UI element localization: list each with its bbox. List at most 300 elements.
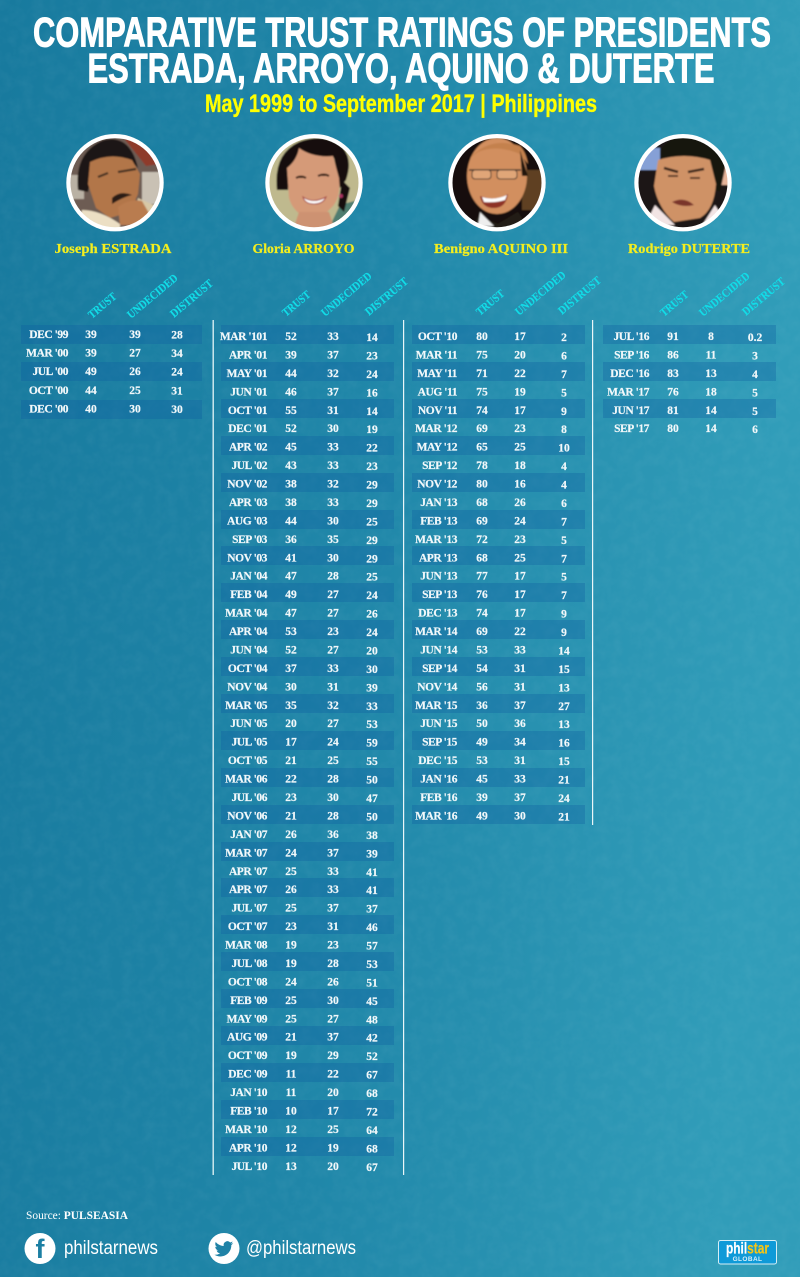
table: Aquino ratings: 69 xyxy=(476,515,488,527)
table: Arroyo ratings: JAN '04 xyxy=(230,571,268,583)
name: Gloria Arroyo: Gloria ARROYO xyxy=(252,242,355,257)
table: Arroyo ratings: 19 xyxy=(285,958,297,970)
table: Duterte ratings: 80 xyxy=(667,423,679,435)
table: Arroyo ratings: NOV '06 xyxy=(227,810,268,822)
table: Aquino ratings: 68 xyxy=(476,552,488,564)
table: Arroyo ratings: 25 xyxy=(285,1013,297,1025)
table: Arroyo ratings: OCT '05 xyxy=(228,755,268,767)
table: Arroyo ratings: FEB '04 xyxy=(230,589,268,601)
table: Estrada ratings: 26 xyxy=(129,366,141,378)
table: Arroyo ratings: 25 xyxy=(366,572,378,584)
table: Aquino ratings: 33 xyxy=(514,644,526,656)
table: Arroyo ratings: 30 xyxy=(327,423,339,435)
icon: facebook: f xyxy=(36,1234,46,1264)
table: Aquino ratings: 77 xyxy=(476,571,488,583)
table: Duterte ratings: 6 xyxy=(752,424,758,436)
table: Arroyo ratings: 20 xyxy=(285,718,297,730)
table: Duterte ratings: 91 xyxy=(667,331,679,343)
table: Estrada ratings: 49 xyxy=(85,366,97,378)
table: Aquino ratings: JUN '15 xyxy=(420,718,458,730)
table: Aquino ratings: 36 xyxy=(476,700,488,712)
divider line 2 xyxy=(403,320,404,1175)
table: Estrada ratings xyxy=(21,325,202,419)
table: Arroyo ratings: 22 xyxy=(327,1069,339,1081)
table: Arroyo ratings: 33 xyxy=(327,884,339,896)
table: Arroyo ratings: 33 xyxy=(366,701,378,713)
table: Duterte ratings: 18 xyxy=(705,386,717,398)
table: Aquino ratings: 31 xyxy=(514,681,526,693)
table: Arroyo ratings: NOV '04 xyxy=(227,681,268,693)
table: Arroyo ratings: OCT '08 xyxy=(228,976,268,988)
table: Arroyo ratings: APR '03 xyxy=(229,497,268,509)
table: Arroyo ratings: 49 xyxy=(285,589,297,601)
column headers: Aquino: UNDECIDED xyxy=(513,269,568,318)
table: Aquino ratings: 15 xyxy=(558,664,570,676)
table: Arroyo ratings: 24 xyxy=(366,369,378,381)
table: Aquino ratings: 54 xyxy=(476,663,488,675)
table: Arroyo ratings: 27 xyxy=(327,1013,339,1025)
table: Arroyo ratings: APR '04 xyxy=(229,626,268,638)
table: Arroyo ratings: 21 xyxy=(285,810,297,822)
column headers: Arroyo: DISTRUST xyxy=(363,275,411,318)
table: Arroyo ratings xyxy=(220,325,394,1174)
table: Aquino ratings: 15 xyxy=(558,756,570,768)
table: Aquino ratings xyxy=(412,325,585,824)
table: Arroyo ratings: 19 xyxy=(285,1050,297,1062)
table: Estrada ratings: JUL '00 xyxy=(32,366,69,378)
table: Duterte ratings: 14 xyxy=(705,423,717,435)
table: Arroyo ratings: 24 xyxy=(327,737,339,749)
table: Estrada ratings: 39 xyxy=(85,348,97,360)
table: Duterte ratings xyxy=(603,325,776,436)
column headers: Estrada xyxy=(86,272,216,321)
table: Duterte ratings: 13 xyxy=(705,368,717,380)
column headers: Duterte: TRUST xyxy=(658,289,691,319)
table: Arroyo ratings: 24 xyxy=(366,590,378,602)
table: Arroyo ratings: 31 xyxy=(327,921,339,933)
table: Arroyo ratings: 22 xyxy=(366,443,378,455)
table: Duterte ratings: 4 xyxy=(752,369,758,381)
table: Arroyo ratings: 32 xyxy=(327,478,339,490)
table: Arroyo ratings: 52 xyxy=(285,644,297,656)
column headers: Duterte: UNDECIDED xyxy=(697,270,752,319)
logo: philstar global xyxy=(718,1240,776,1264)
table: Aquino ratings: 75 xyxy=(476,349,488,361)
table: Arroyo ratings: 31 xyxy=(327,681,339,693)
table: Aquino ratings: 23 xyxy=(514,423,526,435)
table: Estrada ratings: DEC '99 xyxy=(29,329,69,341)
portrait: Joseph Estrada xyxy=(66,134,164,232)
table: Arroyo ratings: JUL '10 xyxy=(231,1161,268,1173)
column headers: Duterte: DISTRUST xyxy=(740,275,788,318)
table: Arroyo ratings: AUG '09 xyxy=(227,1032,268,1044)
table: Aquino ratings: 25 xyxy=(514,552,526,564)
table: Aquino ratings: 80 xyxy=(476,331,488,343)
table: Arroyo ratings: MAR '101 xyxy=(220,331,268,343)
table: Estrada ratings: 30 xyxy=(129,404,141,416)
table: Arroyo ratings: 33 xyxy=(327,497,339,509)
table: Aquino ratings: 6 xyxy=(561,498,567,510)
table: Arroyo ratings: 23 xyxy=(327,940,339,952)
column headers: Aquino: TRUST xyxy=(474,288,507,318)
table: Arroyo ratings: 22 xyxy=(285,774,297,786)
table: Arroyo ratings: 47 xyxy=(366,793,378,805)
divider line 1 xyxy=(212,320,214,1175)
table: Aquino ratings: 76 xyxy=(476,589,488,601)
table: Arroyo ratings: 17 xyxy=(327,1106,339,1118)
table: Arroyo ratings: 19 xyxy=(327,1142,339,1154)
column headers: Estrada: UNDECIDED xyxy=(125,272,180,321)
table: Arroyo ratings: 25 xyxy=(327,1124,339,1136)
table: Arroyo ratings: 11 xyxy=(286,1087,297,1099)
table: Aquino ratings: 69 xyxy=(476,423,488,435)
table: Arroyo ratings: 23 xyxy=(285,792,297,804)
table: Aquino ratings: 65 xyxy=(476,442,488,454)
table: Arroyo ratings: JUL '07 xyxy=(231,903,268,915)
table: Estrada ratings: 30 xyxy=(171,404,183,416)
table: Arroyo ratings: OCT '09 xyxy=(228,1050,268,1062)
table: Arroyo ratings: 30 xyxy=(327,995,339,1007)
table: Aquino ratings: OCT '10 xyxy=(418,331,458,343)
table: Arroyo ratings: 35 xyxy=(285,700,297,712)
table: Duterte ratings: SEP '16 xyxy=(614,349,650,361)
table: Arroyo ratings: 19 xyxy=(366,424,378,436)
table: Arroyo ratings: 27 xyxy=(327,644,339,656)
table: Aquino ratings: 5 xyxy=(561,387,567,399)
table: Arroyo ratings: 33 xyxy=(327,331,339,343)
table: Aquino ratings: 13 xyxy=(558,719,570,731)
table: Arroyo ratings: 30 xyxy=(327,552,339,564)
table: Duterte ratings: 76 xyxy=(667,386,679,398)
table: Arroyo ratings: JAN '10 xyxy=(230,1087,268,1099)
table: Duterte ratings: 5 xyxy=(752,406,758,418)
column headers: Estrada: DISTRUST xyxy=(168,277,216,320)
table: Arroyo ratings: NOV '02 xyxy=(227,478,268,490)
table: Aquino ratings: 23 xyxy=(514,534,526,546)
table: Arroyo ratings: 37 xyxy=(327,386,339,398)
table: Arroyo ratings: 38 xyxy=(285,478,297,490)
table: Arroyo ratings: 52 xyxy=(285,423,297,435)
table: Arroyo ratings: 33 xyxy=(327,663,339,675)
table: Arroyo ratings: FEB '10 xyxy=(230,1106,268,1118)
table: Aquino ratings: DEC '13 xyxy=(418,608,458,620)
table: Aquino ratings: MAR '15 xyxy=(415,700,458,712)
table: Arroyo ratings: 33 xyxy=(327,866,339,878)
table: Arroyo ratings: 28 xyxy=(327,571,339,583)
table: Arroyo ratings: JUL '06 xyxy=(231,792,268,804)
icon: twitter xyxy=(208,1233,240,1264)
table: Aquino ratings: 33 xyxy=(514,774,526,786)
table: Aquino ratings: SEP '13 xyxy=(422,589,458,601)
table: Estrada ratings: MAR '00 xyxy=(26,348,69,360)
table: Arroyo ratings: 42 xyxy=(366,1033,378,1045)
subtitle: May 1999 to September 2017 | Philippines xyxy=(205,90,597,118)
table: Aquino ratings: 7 xyxy=(561,590,567,602)
table: Aquino ratings: 31 xyxy=(514,755,526,767)
table: Duterte ratings: MAR '17 xyxy=(607,386,650,398)
table: Duterte ratings: JUL '16 xyxy=(613,331,650,343)
table: Arroyo ratings: 23 xyxy=(285,921,297,933)
portrait: Benigno Aquino III xyxy=(448,134,546,231)
facebook handle: philstarnews xyxy=(64,1238,158,1259)
table: Arroyo ratings: 20 xyxy=(327,1087,339,1099)
table: Aquino ratings: SEP '14 xyxy=(422,663,458,675)
table: Arroyo ratings: 30 xyxy=(327,792,339,804)
table: Aquino ratings: 30 xyxy=(514,810,526,822)
table: Arroyo ratings: 12 xyxy=(285,1142,297,1154)
table: Aquino ratings: 18 xyxy=(514,460,526,472)
table: Aquino ratings: 26 xyxy=(514,497,526,509)
table: Aquino ratings: 22 xyxy=(514,368,526,380)
table: Arroyo ratings: 35 xyxy=(327,534,339,546)
table: Arroyo ratings: 46 xyxy=(285,386,297,398)
table: Duterte ratings: 3 xyxy=(752,350,758,362)
table: Arroyo ratings: 41 xyxy=(366,867,378,879)
table: Arroyo ratings: 16 xyxy=(366,387,378,399)
table: Aquino ratings: 4 xyxy=(561,461,567,473)
table: Aquino ratings: 5 xyxy=(561,535,567,547)
table: Arroyo ratings: OCT '04 xyxy=(228,663,268,675)
table: Arroyo ratings: 52 xyxy=(366,1051,378,1063)
table: Aquino ratings: 7 xyxy=(561,516,567,528)
table: Arroyo ratings: 59 xyxy=(366,738,378,750)
table: Duterte ratings: 0.2 xyxy=(748,332,762,344)
table: Aquino ratings: MAR '12 xyxy=(415,423,458,435)
table: Aquino ratings: 68 xyxy=(476,497,488,509)
table: Arroyo ratings: APR '01 xyxy=(229,349,268,361)
table: Aquino ratings: 9 xyxy=(561,406,567,418)
table: Aquino ratings: 22 xyxy=(514,626,526,638)
table: Estrada ratings: DEC '00 xyxy=(29,404,69,416)
table: Arroyo ratings: OCT '07 xyxy=(228,921,268,933)
table: Arroyo ratings: 46 xyxy=(366,922,378,934)
table: Arroyo ratings: 45 xyxy=(285,442,297,454)
table: Arroyo ratings: 41 xyxy=(285,552,297,564)
table: Arroyo ratings: 30 xyxy=(327,515,339,527)
table: Arroyo ratings: APR '02 xyxy=(229,442,268,454)
table: Arroyo ratings: 19 xyxy=(285,940,297,952)
table: Estrada ratings: OCT '00 xyxy=(29,385,69,397)
table: Arroyo ratings: DEC '09 xyxy=(228,1069,268,1081)
table: Aquino ratings: 7 xyxy=(561,369,567,381)
table: Duterte ratings: 11 xyxy=(706,349,717,361)
table: Arroyo ratings: 23 xyxy=(366,461,378,473)
table: Aquino ratings: 39 xyxy=(476,792,488,804)
table: Estrada ratings: 39 xyxy=(85,329,97,341)
table: Arroyo ratings: JAN '07 xyxy=(230,829,268,841)
table: Arroyo ratings: 55 xyxy=(285,405,297,417)
table: Arroyo ratings: 39 xyxy=(366,848,378,860)
table: Arroyo ratings: 37 xyxy=(366,904,378,916)
table: Aquino ratings: JAN '13 xyxy=(420,497,458,509)
table: Arroyo ratings: 47 xyxy=(285,571,297,583)
table: Arroyo ratings: 14 xyxy=(366,332,378,344)
table: Duterte ratings: SEP '17 xyxy=(614,423,650,435)
table: Aquino ratings: 71 xyxy=(476,368,488,380)
table: Arroyo ratings: 37 xyxy=(327,847,339,859)
table: Aquino ratings: 78 xyxy=(476,460,488,472)
table: Arroyo ratings: 53 xyxy=(366,719,378,731)
table: Estrada ratings: 44 xyxy=(85,385,97,397)
table: Arroyo ratings: MAY '01 xyxy=(227,368,268,380)
table: Duterte ratings: JUN '17 xyxy=(612,405,650,417)
table: Aquino ratings: 21 xyxy=(558,811,570,823)
column headers: Aquino: DISTRUST xyxy=(556,274,604,317)
table: Aquino ratings: MAY '12 xyxy=(417,442,458,454)
table: Arroyo ratings: 47 xyxy=(285,608,297,620)
table: Aquino ratings: 49 xyxy=(476,810,488,822)
table: Aquino ratings: 19 xyxy=(514,386,526,398)
twitter handle: @philstarnews xyxy=(246,1238,356,1259)
table: Arroyo ratings: AUG '03 xyxy=(227,515,268,527)
table: Aquino ratings: NOV '11 xyxy=(418,405,458,417)
table: Estrada ratings: 34 xyxy=(171,348,183,360)
table: Arroyo ratings: MAR '10 xyxy=(225,1124,268,1136)
table: Arroyo ratings: 38 xyxy=(366,830,378,842)
table: Arroyo ratings: 27 xyxy=(327,589,339,601)
table: Arroyo ratings: JUL '05 xyxy=(231,737,268,749)
table: Aquino ratings: 56 xyxy=(476,681,488,693)
column headers: Arroyo: UNDECIDED xyxy=(319,270,374,319)
table: Arroyo ratings: 37 xyxy=(327,1032,339,1044)
table: Aquino ratings: 37 xyxy=(514,792,526,804)
table: Estrada ratings: 31 xyxy=(171,386,183,398)
table: Arroyo ratings: 31 xyxy=(327,405,339,417)
table: Arroyo ratings: JUN '05 xyxy=(230,718,268,730)
table: Aquino ratings: 69 xyxy=(476,626,488,638)
table: Arroyo ratings: 52 xyxy=(285,331,297,343)
table: Aquino ratings: NOV '12 xyxy=(417,478,458,490)
table: Aquino ratings: MAR '14 xyxy=(415,626,458,638)
table: Aquino ratings: 37 xyxy=(514,700,526,712)
table: Arroyo ratings: 48 xyxy=(366,1014,378,1026)
table: Arroyo ratings: 36 xyxy=(285,534,297,546)
table: Aquino ratings: FEB '13 xyxy=(420,515,458,527)
table: Arroyo ratings: 41 xyxy=(366,885,378,897)
table: Aquino ratings: 7 xyxy=(561,553,567,565)
table: Aquino ratings: APR '13 xyxy=(419,552,458,564)
table: Aquino ratings: FEB '16 xyxy=(420,792,458,804)
column headers: Arroyo: TRUST xyxy=(280,289,313,319)
icon: facebook xyxy=(24,1233,56,1264)
table: Aquino ratings: 53 xyxy=(476,755,488,767)
table: Arroyo ratings: 29 xyxy=(366,535,378,547)
table: Arroyo ratings: 25 xyxy=(366,516,378,528)
logo: philstar global: GLOBAL xyxy=(733,1256,762,1263)
table: Arroyo ratings: JUN '04 xyxy=(230,644,268,656)
table: Arroyo ratings: 32 xyxy=(327,700,339,712)
table: Duterte ratings: 14 xyxy=(705,405,717,417)
table: Arroyo ratings: 53 xyxy=(285,626,297,638)
table: Aquino ratings: 24 xyxy=(558,793,570,805)
table: Arroyo ratings: 24 xyxy=(285,976,297,988)
table: Duterte ratings: 83 xyxy=(667,368,679,380)
table: Aquino ratings: 14 xyxy=(558,646,570,658)
table: Estrada ratings: 40 xyxy=(85,404,97,416)
table: Arroyo ratings: 37 xyxy=(327,349,339,361)
table: Arroyo ratings: 11 xyxy=(286,1069,297,1081)
table: Duterte ratings: 5 xyxy=(752,387,758,399)
table: Aquino ratings: 74 xyxy=(476,608,488,620)
table: Arroyo ratings: 13 xyxy=(285,1161,297,1173)
table: Arroyo ratings: 33 xyxy=(327,442,339,454)
table: Arroyo ratings: OCT '01 xyxy=(228,405,268,417)
table: Duterte ratings: 86 xyxy=(667,349,679,361)
table: Arroyo ratings: 50 xyxy=(366,811,378,823)
table: Arroyo ratings: 26 xyxy=(285,829,297,841)
table: Estrada ratings: 24 xyxy=(171,366,183,378)
table: Aquino ratings: 31 xyxy=(514,663,526,675)
table: Arroyo ratings: 10 xyxy=(285,1106,297,1118)
table: Aquino ratings: 8 xyxy=(561,424,567,436)
table: Aquino ratings: 72 xyxy=(476,534,488,546)
column headers: Duterte xyxy=(658,270,788,319)
table: Arroyo ratings: MAR '04 xyxy=(225,608,268,620)
table: Aquino ratings: 13 xyxy=(558,682,570,694)
column headers: Arroyo xyxy=(280,270,411,319)
table: Aquino ratings: SEP '12 xyxy=(422,460,458,472)
table: Arroyo ratings: 17 xyxy=(285,737,297,749)
table: Arroyo ratings: 27 xyxy=(327,608,339,620)
table: Arroyo ratings: 72 xyxy=(366,1106,378,1118)
table: Arroyo ratings: DEC '01 xyxy=(228,423,268,435)
table: Arroyo ratings: 24 xyxy=(366,627,378,639)
table: Aquino ratings: 27 xyxy=(558,701,570,713)
table: Aquino ratings: 80 xyxy=(476,478,488,490)
table: Arroyo ratings: 32 xyxy=(327,368,339,380)
table: Aquino ratings: 20 xyxy=(514,349,526,361)
table: Arroyo ratings: 57 xyxy=(366,940,378,952)
table: Arroyo ratings: 28 xyxy=(327,810,339,822)
table: Arroyo ratings: 37 xyxy=(327,903,339,915)
table: Arroyo ratings: APR '10 xyxy=(229,1142,268,1154)
table: Aquino ratings: AUG '11 xyxy=(418,386,458,398)
table: Aquino ratings: DEC '15 xyxy=(418,755,458,767)
table: Aquino ratings: 9 xyxy=(561,627,567,639)
divider line 3 xyxy=(592,320,593,825)
table: Arroyo ratings: 44 xyxy=(285,515,297,527)
table: Arroyo ratings: 39 xyxy=(285,349,297,361)
table: Arroyo ratings: 55 xyxy=(366,756,378,768)
table: Arroyo ratings: 23 xyxy=(327,626,339,638)
table: Arroyo ratings: 29 xyxy=(366,480,378,492)
table: Arroyo ratings: 23 xyxy=(366,350,378,362)
logo: philstar global: philstar xyxy=(726,1240,769,1258)
table: Aquino ratings: 6 xyxy=(561,350,567,362)
table: Arroyo ratings: 28 xyxy=(327,958,339,970)
table: Duterte ratings: 81 xyxy=(667,405,679,417)
table: Arroyo ratings: 24 xyxy=(285,847,297,859)
table: Arroyo ratings: 20 xyxy=(366,646,378,658)
table: Aquino ratings: 25 xyxy=(514,442,526,454)
table: Arroyo ratings: 64 xyxy=(366,1125,378,1137)
table: Arroyo ratings: 12 xyxy=(285,1124,297,1136)
table: Arroyo ratings: 14 xyxy=(366,406,378,418)
table: Aquino ratings: MAR '16 xyxy=(415,810,458,822)
table: Arroyo ratings: MAR '06 xyxy=(225,774,268,786)
table: Aquino ratings: 74 xyxy=(476,405,488,417)
table: Arroyo ratings: 25 xyxy=(327,755,339,767)
table: Arroyo ratings: 25 xyxy=(285,995,297,1007)
table: Arroyo ratings: 26 xyxy=(366,609,378,621)
table: Aquino ratings: 75 xyxy=(476,386,488,398)
table: Arroyo ratings: MAR '07 xyxy=(225,847,268,859)
table: Aquino ratings: 9 xyxy=(561,609,567,621)
table: Arroyo ratings: JUN '01 xyxy=(230,386,268,398)
table: Aquino ratings: 10 xyxy=(558,443,570,455)
table: Arroyo ratings: 45 xyxy=(366,996,378,1008)
source note: Source: PULSEASIA xyxy=(26,1210,129,1222)
